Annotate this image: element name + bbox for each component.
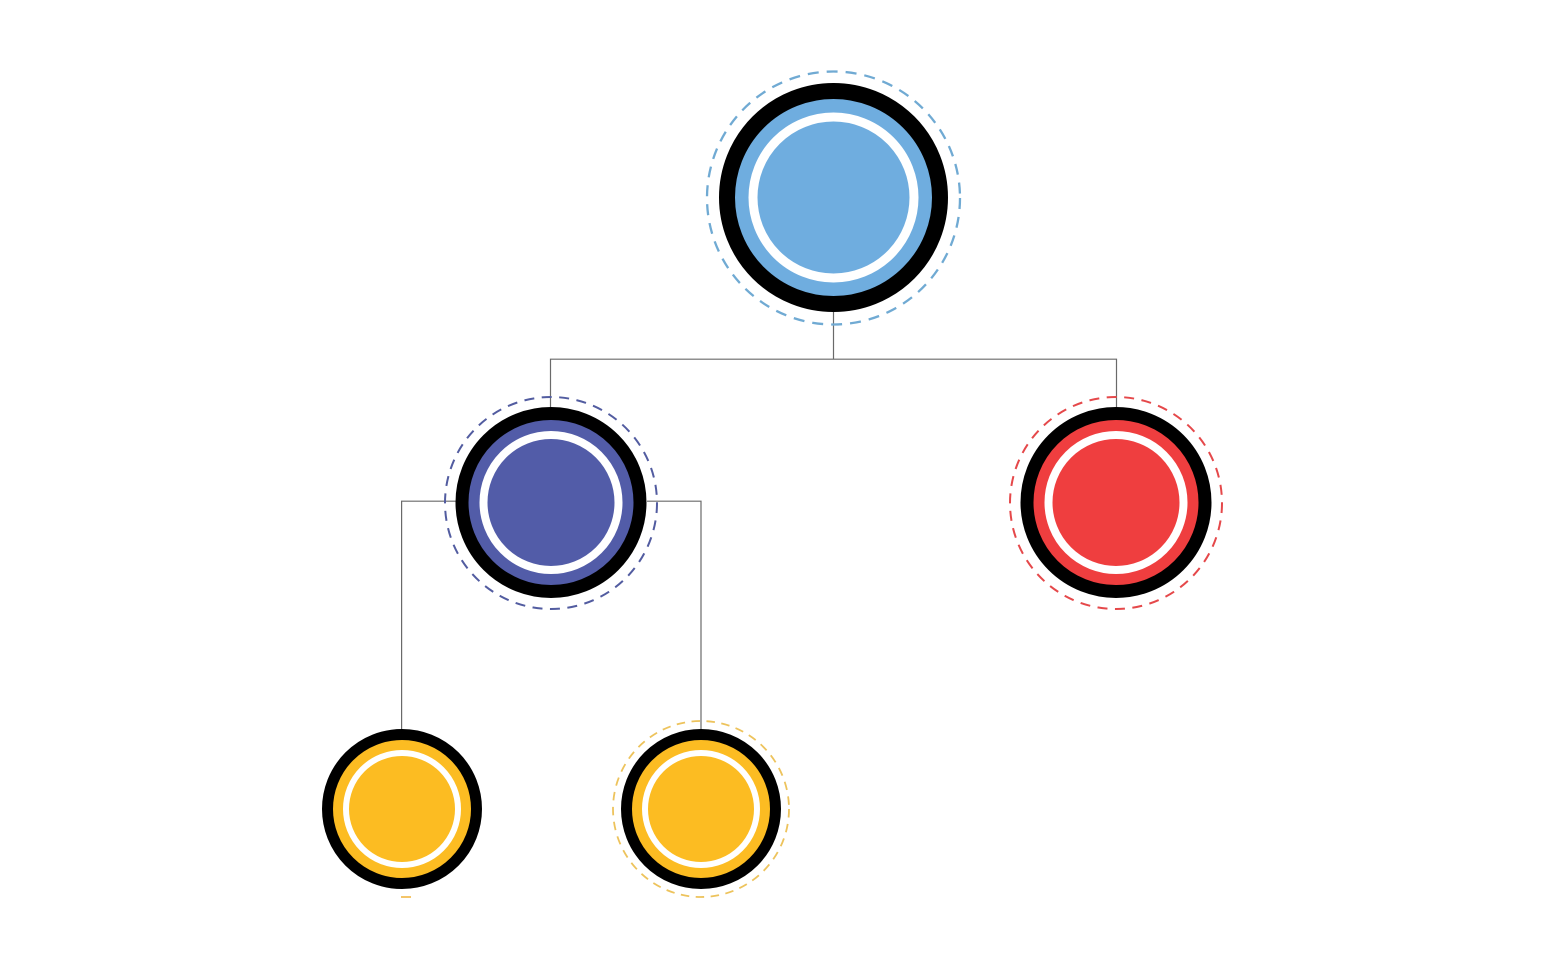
node: indigo [445, 397, 657, 609]
connector: indigo node to yellow nodes [402, 501, 701, 730]
node: red [1010, 397, 1222, 609]
node: yellow left [328, 734, 476, 897]
connector: root to second level [550, 312, 1116, 407]
node: yellow right [613, 721, 789, 897]
node: root blue [707, 72, 960, 324]
connector lines [402, 312, 1117, 730]
